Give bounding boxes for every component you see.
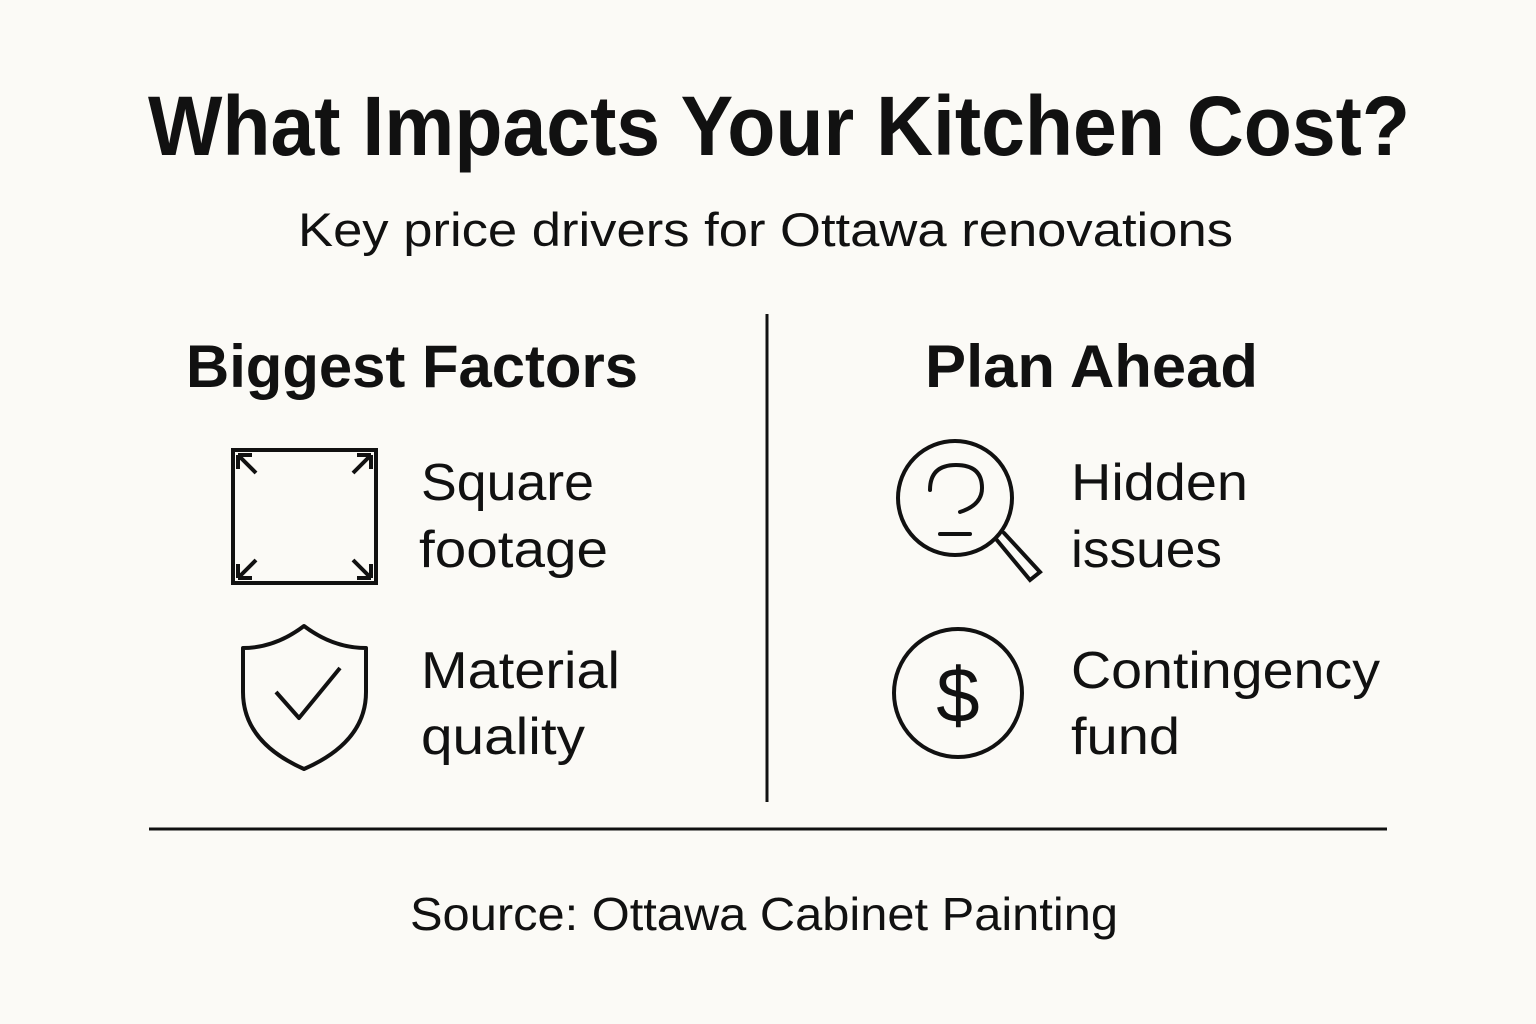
heading: Plan Ahead: Plan Ahead — [925, 333, 1258, 400]
text: Square footage: footage — [419, 521, 608, 579]
text: Material quality: quality — [421, 708, 585, 766]
icon: shield with check — [243, 626, 366, 769]
text: Square footage: Square — [421, 454, 594, 512]
text: Square footage — [419, 454, 608, 579]
text: Material quality — [421, 642, 620, 766]
icon: magnifier with question mark — [898, 441, 1040, 580]
icon: dollar coin — [894, 629, 1022, 757]
text: Contingency fund: Contingency — [1071, 642, 1380, 700]
text: Material quality: Material — [421, 642, 620, 700]
subtitle: Key price drivers for Ottawa renovations — [298, 203, 1233, 256]
text: Contingency fund: fund — [1071, 708, 1180, 766]
text: Contingency fund — [1071, 642, 1380, 766]
title: What Impacts Your Kitchen Cost? — [148, 79, 1410, 173]
text: Hidden issues — [1071, 454, 1248, 579]
source: Source: Ottawa Cabinet Painting — [410, 888, 1118, 940]
icon: dollar coin: $ — [936, 651, 980, 739]
icon: square footage — [233, 450, 376, 583]
text: Hidden issues: Hidden — [1071, 454, 1248, 512]
heading: Biggest Factors: Biggest Factors — [186, 333, 638, 400]
text: Hidden issues: issues — [1071, 521, 1222, 579]
